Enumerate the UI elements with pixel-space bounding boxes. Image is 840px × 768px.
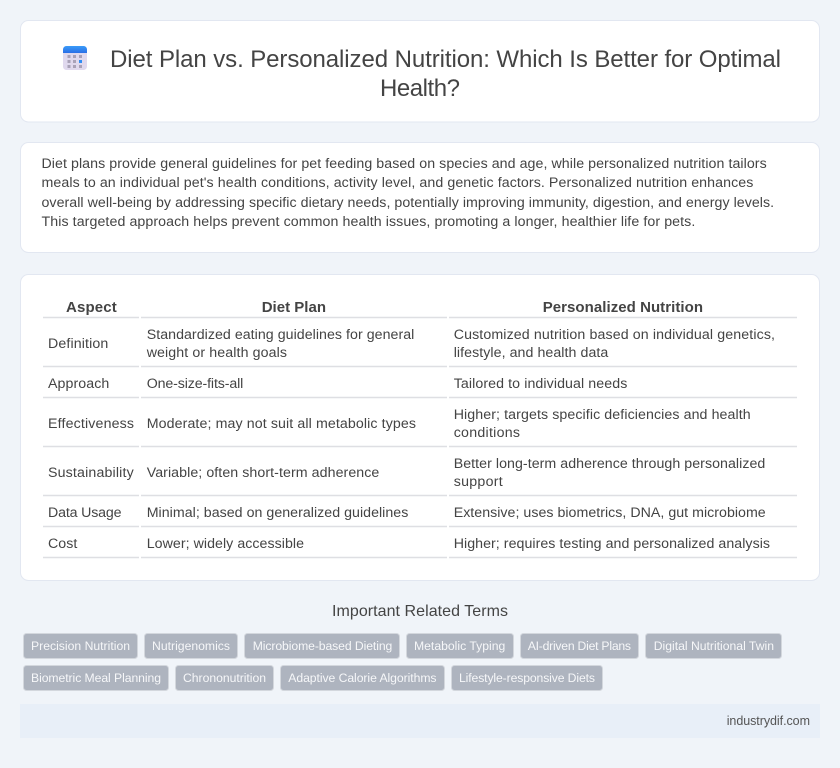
- row: Cost: Cost: [48, 536, 77, 552]
- tag: [176, 666, 274, 690]
- tag: [280, 666, 444, 690]
- row: Sustainability: Better long-term adherence through personalized: [454, 456, 765, 472]
- tag: [24, 666, 168, 690]
- row: Definition: lifestyle, and health data: [454, 345, 608, 361]
- row: Approach: Approach: [48, 376, 109, 392]
- footer: [20, 704, 820, 738]
- tag: [452, 666, 602, 690]
- panel: title header: [20, 20, 820, 122]
- table header row: Diet Plan: [262, 299, 326, 316]
- row: Approach: One-size-fits-all: [147, 376, 243, 392]
- row: Effectiveness: [48, 407, 751, 441]
- row: Effectiveness: Higher; targets specific deficiencies and health: [454, 407, 751, 423]
- table header row: Aspect: [66, 299, 117, 316]
- table header row: [66, 299, 703, 316]
- tag: Chrononutrition: [183, 671, 266, 685]
- row: Data Usage: Data Usage: [48, 505, 122, 521]
- panel: introduction: [20, 142, 820, 252]
- tag: Biometric Meal Planning: [31, 671, 161, 685]
- tag: Lifestyle-responsive Diets: [459, 671, 595, 685]
- heading: important related terms: Important Related Terms: [332, 603, 508, 620]
- row: Effectiveness: Moderate; may not suit all metabolic types: [147, 416, 416, 432]
- row: Data Usage: Extensive; uses biometrics, DNA, gut microbiome: [454, 505, 766, 521]
- tag list: [24, 634, 782, 690]
- tag: AI-driven Diet Plans: [528, 639, 631, 653]
- tag: Adaptive Calorie Algorithms: [288, 671, 436, 685]
- row: Definition: weight or health goals: [146, 345, 287, 361]
- title: Diet Plan vs. Personalized Nutrition: Which Is Better for Optimal: [110, 46, 781, 73]
- intro text block: Diet plans provide general guidelines for pet feeding based on species and age, while personalized nutrition tailors: [42, 156, 767, 172]
- row: Cost: Higher; requires testing and personalized analysis: [454, 536, 770, 552]
- row: Effectiveness: conditions: [454, 425, 520, 441]
- tag: [520, 634, 638, 658]
- tag: [144, 634, 238, 658]
- row: Sustainability: Variable; often short-term adherence: [147, 465, 379, 481]
- panel: comparison table: [20, 274, 820, 580]
- title: [110, 46, 781, 102]
- row: Definition: [48, 327, 775, 361]
- tag: Nutrigenomics: [152, 639, 230, 653]
- title: Health?: [380, 75, 460, 102]
- row: Cost: [48, 536, 770, 552]
- row: Sustainability: [48, 456, 765, 490]
- icon: calendar: [63, 46, 87, 70]
- row: Approach: [48, 376, 627, 392]
- row: Cost: Lower; widely accessible: [147, 536, 304, 552]
- footer: industrydif.com: [727, 714, 810, 728]
- row: Sustainability: support: [454, 474, 503, 490]
- row: Definition: Definition: [48, 336, 108, 352]
- tag: [24, 634, 138, 658]
- tag: [646, 634, 782, 658]
- row: Definition: Standardized eating guidelines for general: [147, 327, 414, 343]
- tag: Digital Nutritional Twin: [654, 639, 774, 653]
- row: Effectiveness: Effectiveness: [48, 416, 134, 432]
- row: Data Usage: [48, 505, 766, 521]
- intro text block: [42, 156, 774, 230]
- row: Approach: Tailored to individual needs: [454, 376, 627, 392]
- tag: Metabolic Typing: [414, 639, 505, 653]
- table header row: Personalized Nutrition: [543, 299, 703, 316]
- tag: [406, 634, 514, 658]
- row: Data Usage: Minimal; based on generalized guidelines: [147, 505, 408, 521]
- tag: Microbiome-based Dieting: [253, 639, 392, 653]
- intro text block: This targeted approach helps prevent common health issues, promoting a longer, healthier life for pets.: [42, 214, 695, 230]
- intro text block: meals to an individual pet's health conditions, activity level, and genetic factors. Personalized nutrition enhances: [42, 175, 753, 191]
- row: Definition: Customized nutrition based on individual genetics,: [454, 327, 775, 343]
- tag: [244, 634, 400, 658]
- row: Sustainability: Sustainability: [48, 465, 135, 481]
- tag: Precision Nutrition: [31, 639, 130, 653]
- intro text block: overall well-being by addressing specific dietary needs, potentially improving immunity, digestion, and energy levels.: [42, 195, 774, 211]
